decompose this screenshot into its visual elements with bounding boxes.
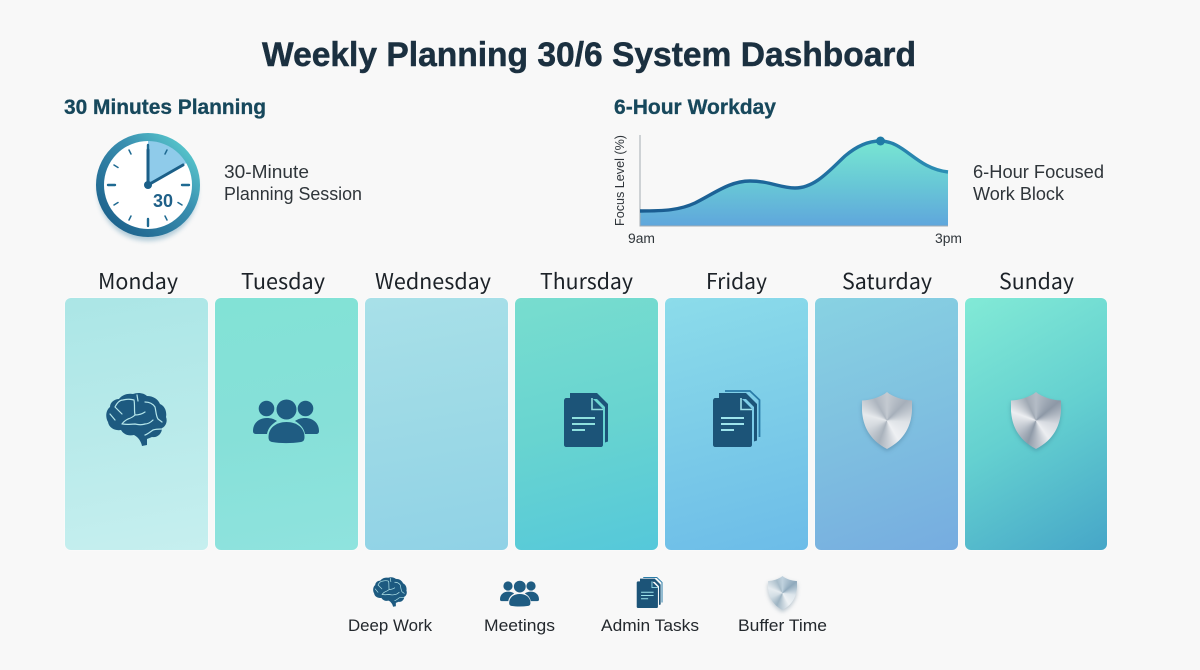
legend: admin tasks: [601, 577, 699, 635]
icon: planning clock: 30: [153, 191, 173, 211]
text: 6-hour focused work block: [973, 162, 1104, 204]
icon: document stack: [713, 390, 760, 447]
icon: shield: [1009, 392, 1062, 452]
label: Buffer Time: [738, 616, 827, 635]
panel: friday: [665, 298, 808, 550]
legend: meetings: [484, 580, 555, 635]
label: Meetings: [484, 616, 555, 635]
day labels: Thursday: [540, 265, 633, 296]
day labels: Tuesday: [241, 265, 325, 296]
icon: shield: [766, 576, 800, 614]
day labels: Sunday: [999, 265, 1074, 296]
text: 30-minute planning session: [224, 162, 362, 204]
day labels: Monday: [98, 265, 178, 296]
icon: brain: [106, 393, 167, 446]
panel: saturday: [815, 298, 958, 550]
panel: sunday: [965, 298, 1107, 550]
icon: people: [253, 400, 319, 444]
heading: 30 minutes planning: 30 Minutes Planning: [64, 96, 266, 119]
icon: document stack: [636, 577, 662, 608]
chart: focus level area chart: [612, 135, 962, 246]
title: Weekly Planning 30/6 System Dashboard: [262, 36, 916, 74]
text: 30-minute planning session: Planning Session: [224, 184, 362, 204]
text: 30-minute planning session: 30-Minute: [224, 162, 309, 182]
panel: thursday: [515, 298, 658, 550]
label: Deep Work: [348, 616, 432, 635]
icon: people: [500, 580, 539, 606]
label: Admin Tasks: [601, 616, 699, 635]
chart: focus level area chart: 9am: [628, 231, 655, 246]
day labels: Wednesday: [375, 265, 491, 296]
chart: focus level area chart: 3pm: [935, 231, 962, 246]
day labels: [98, 265, 1074, 296]
icon: shield: [860, 392, 914, 452]
text: 6-hour focused work block: Work Block: [973, 184, 1065, 204]
panel: wednesday: [365, 298, 508, 550]
icon: documents: [564, 393, 608, 447]
day labels: Friday: [706, 265, 767, 296]
panel: tuesday: [215, 298, 358, 550]
icon: planning clock: [96, 133, 200, 244]
text: 6-hour focused work block: 6-Hour Focused: [973, 162, 1104, 182]
icon: brain: [373, 577, 407, 607]
panel: monday: [65, 298, 208, 550]
chart: focus level area chart: Focus Level (%): [612, 135, 627, 226]
heading: 6-hour workday: 6-Hour Workday: [614, 96, 776, 119]
legend: deep work: [348, 577, 432, 635]
day labels: Saturday: [842, 265, 932, 296]
legend: buffer time: [738, 576, 827, 635]
